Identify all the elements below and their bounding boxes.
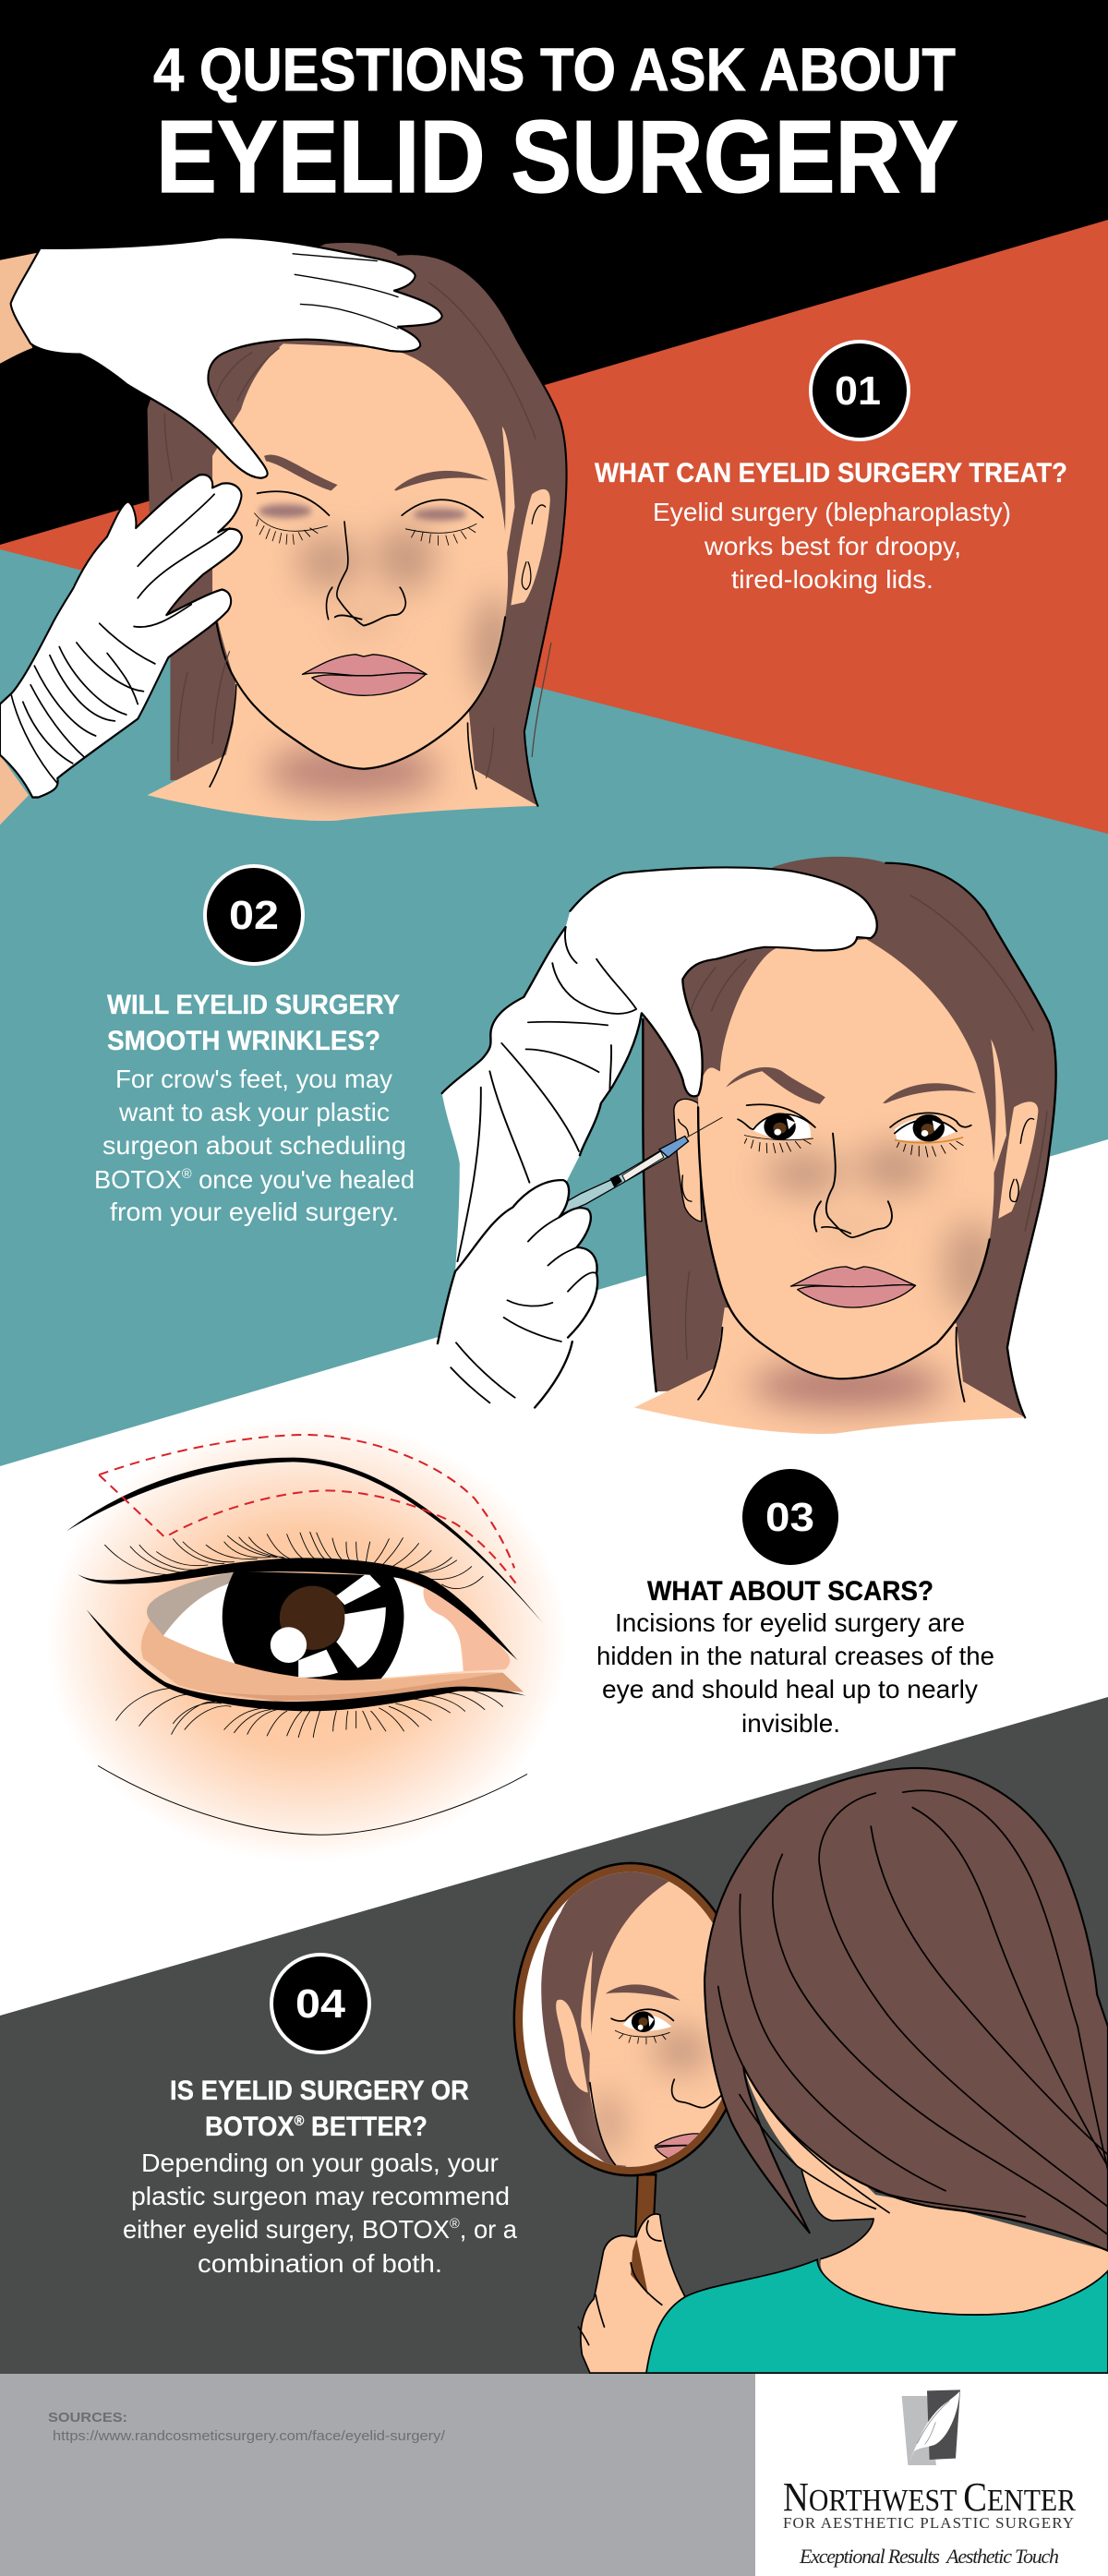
nose [327,522,405,626]
lower lid [87,1609,526,1711]
background: dark grey band [0,1697,1108,2375]
upper lashes [105,1532,483,1589]
hair sliver of skin [991,1040,1006,1179]
outer corner [424,1588,510,1671]
badge 02: 02 [229,893,279,938]
hair outline and strands [398,254,567,806]
brow crease [66,1458,542,1622]
logo name: NORTHWEST CENTER [783,2474,1076,2520]
hair strands [686,895,1047,1359]
syringe [557,1117,722,1216]
forearm lower [0,755,29,825]
catchlights [298,1572,386,1678]
footer logo panel [755,2374,1108,2576]
ear lines [679,1118,1034,1202]
body 01 [653,498,1011,594]
section 04 [123,1955,517,2278]
title [153,35,958,214]
badge 03: 03 [765,1495,814,1540]
illustration: close-up eye with incision marks [46,1419,567,1862]
body 03: hidden in the natural creases of the [596,1642,994,1670]
inner corner [147,1572,235,1636]
body 02: For crow's feet, you may [115,1065,392,1093]
skin glow [46,1419,567,1862]
glove lower hand [0,475,242,798]
neck and shoulders [148,680,537,821]
hair [643,857,1056,1417]
body 04: , or a [460,2215,517,2244]
hair strands [718,1790,1108,2234]
background: red band [0,220,1108,840]
reflected jaw [590,2083,615,2165]
shirt [646,2259,1108,2373]
neck shadow [752,1362,945,1410]
reflected lips [654,2133,700,2159]
glove and sleeve [442,867,877,1271]
footer sources panel [0,2374,755,2576]
heading 01: WHAT CAN EYELID SURGERY TREAT? [595,458,1067,488]
badge 04: 04 [295,1981,346,2027]
body 01: Eyelid surgery (blepharoplasty) [653,498,1011,526]
heading 02: WILL EYELID SURGERY [107,990,400,1020]
glove upper hand [11,237,442,478]
eyebrows [264,455,489,491]
incision dashes [99,1435,519,1588]
neck lines [698,1328,965,1402]
upper lid [78,1558,518,1660]
body 02: want to ask your plastic [118,1098,390,1126]
section 03 [596,1469,994,1738]
background: black band [0,0,1108,554]
neck lines [210,685,476,788]
eyelashes [255,513,476,545]
badge 01: 01 [835,368,881,414]
reflected eye [611,2009,673,2044]
mirror reflection [541,1872,722,2167]
neck outline [801,2171,873,2258]
waterline shade [198,1673,524,1702]
body 02: surgeon about scheduling [102,1131,406,1160]
sleeve folds [457,927,636,1261]
left eye [738,1104,815,1153]
background: white band [0,1139,1108,2022]
background: teal band [0,549,1108,1477]
body 04 [123,2149,517,2278]
pupil [280,1586,345,1650]
body 02: once you've healed [192,1165,415,1194]
reflected hair sliver [581,1951,593,2063]
body 02: BOTOX [94,1165,185,1194]
right eye [890,1113,971,1157]
body 03: Incisions for eyelid surgery are [615,1608,965,1637]
hair sliver of skin [502,427,515,569]
body 03: invisible. [741,1709,840,1738]
lower hand outline [438,1180,597,1408]
ear lines [522,505,546,590]
waterline [141,1620,503,1701]
heading 04: BETTER? [304,2112,428,2142]
title: EYELID SURGERY [156,100,958,214]
face shading [295,526,517,698]
body 01: tired-looking lids. [731,565,933,594]
body 04: plastic surgeon may recommend [131,2182,510,2210]
ear [511,489,550,606]
jaw outline [216,617,505,769]
neck shadow [264,746,440,798]
body 04: either eyelid surgery, BOTOX [123,2215,458,2244]
jaw outline [698,1107,990,1378]
eyebrows [726,1067,976,1104]
reflected shading [594,2028,710,2155]
lips [302,655,427,695]
forearm upper [0,252,38,364]
reflected eyebrow [606,1984,680,2001]
glove outline [442,867,877,1155]
lower lashes [116,1688,503,1738]
heading 02: SMOOTH WRINKLES? [107,1026,380,1056]
sources label: SOURCES: [48,2410,127,2426]
logo subtitle: FOR AESTHETIC PLASTIC SURGERY [783,2514,1074,2532]
reflected nose [672,2079,724,2108]
hair [148,243,567,806]
badge 04 [271,1955,369,2052]
heading 04 [170,2076,469,2142]
hair outline [643,863,1056,1417]
heading 03: WHAT ABOUT SCARS? [647,1576,933,1607]
heading 02 [107,990,400,1056]
section 02 [94,866,415,1226]
eye white [163,1577,464,1680]
lower gloved hand [438,1180,597,1460]
finger lines [578,2221,662,2345]
body 04: Depending on your goals, your [141,2149,499,2177]
body 02 [94,1065,415,1226]
badge 02 [205,866,303,964]
glove lower wrinkles [11,494,230,783]
lower hand folds [451,1218,596,1402]
lower crease [98,1766,527,1835]
closed eyelid lines [258,491,483,517]
body 04: ® [450,2216,460,2232]
mirror frame [514,1863,747,2175]
eyelid shadows [259,504,467,521]
neck and jaw skin [743,2066,1108,2314]
iris [223,1571,403,1680]
badge 03 [742,1469,838,1565]
logo tagline: Exceptional Results Aesthetic Touch [799,2545,1059,2568]
hand holding mirror [581,2214,685,2373]
body 04: combination of both. [198,2249,442,2278]
reflected hair [541,1872,722,2166]
reflected ear [556,2000,588,2092]
body 02: from your eyelid surgery. [110,1198,399,1226]
nose [814,1133,892,1237]
face [212,343,508,769]
heading 04: BOTOX [205,2112,303,2142]
catchlight circle [271,1627,307,1663]
heading 04: IS EYELID SURGERY OR [170,2076,469,2106]
lips [791,1267,915,1307]
body 01: works best for droopy, [704,532,961,560]
heading 04: ® [295,2113,305,2129]
mirror glass [523,1872,739,2167]
right ear [998,1101,1038,1219]
title: 4 QUESTIONS TO ASK ABOUT [153,35,956,103]
mirror handle [632,2174,656,2294]
hand lines and handle end [631,2239,648,2294]
face [698,939,994,1378]
logo mark [902,2389,960,2472]
reflected face [589,1882,722,2167]
back hair [705,1768,1108,2251]
illustration: woman looking in hand mirror [514,1768,1108,2373]
body 03 [596,1608,994,1738]
left ear [674,1099,702,1222]
section 01 [595,342,1067,594]
glove upper wrinkles [293,254,398,329]
badge 01 [811,342,909,439]
sources url: https://www.randcosmeticsurgery.com/face/eyelid-surgery/ [53,2428,446,2444]
body 02: ® [182,1166,192,1182]
body 03: eye and should heal up to nearly [602,1675,978,1703]
neck and shoulders [634,1307,1025,1434]
illustration: woman with closed eyes and gloved hands [0,237,567,825]
illustration: woman receiving injection [438,857,1056,1460]
face shading [766,1141,998,1316]
